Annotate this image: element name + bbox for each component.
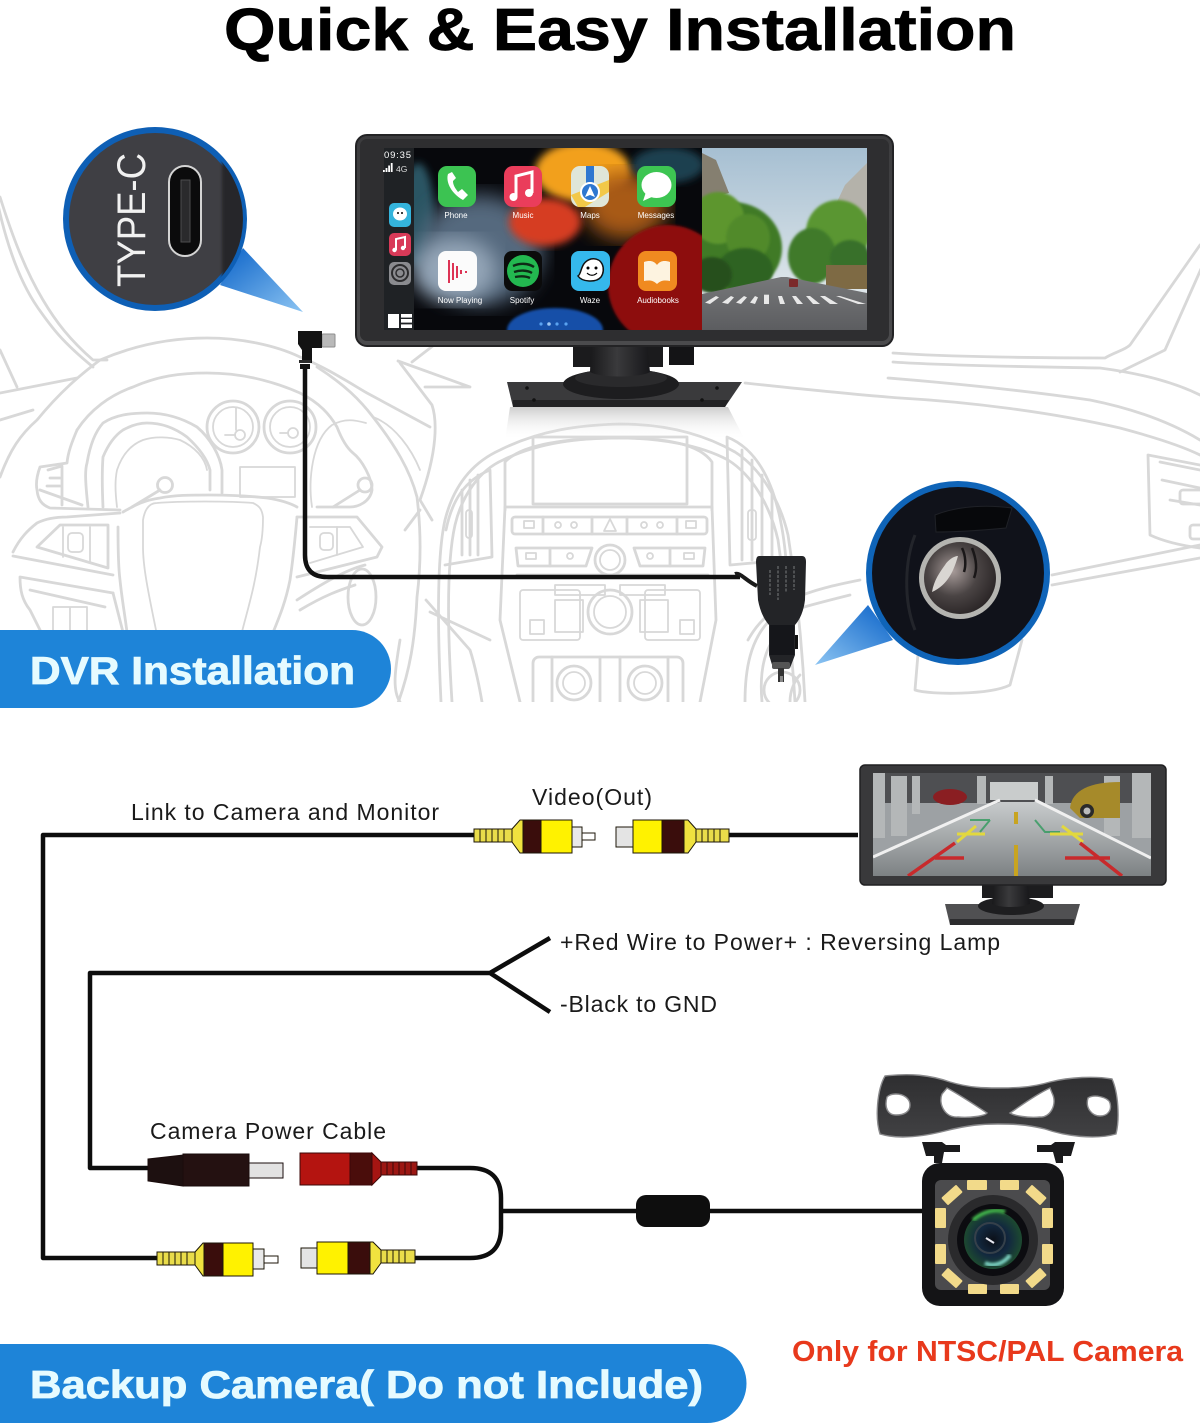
inline box <box>636 1195 710 1227</box>
app: Now Playing <box>438 251 482 305</box>
lower right trim <box>745 580 860 702</box>
USB-C plug <box>298 331 335 369</box>
wire labels: Video(Out) <box>532 784 652 810</box>
section label: DVR Installation: DVR Installation <box>30 650 355 693</box>
callout tail <box>220 248 303 312</box>
app: Messages <box>637 166 676 220</box>
LED ring <box>935 1180 1053 1294</box>
buttons row 1 <box>512 517 707 534</box>
app: Spotify <box>504 251 542 305</box>
far right vent <box>1148 455 1200 548</box>
RCA plug: camera left <box>157 1243 278 1276</box>
wire labels <box>131 784 1000 1144</box>
callout tail <box>815 605 893 665</box>
app: Messages: Messages <box>638 211 674 220</box>
note: camera compatibility: Only for NTSC/PAL Camera <box>792 1336 1184 1368</box>
CarPlay sidebar <box>383 148 414 330</box>
section label: DVR Installation <box>0 630 391 708</box>
callout circle <box>866 481 1050 665</box>
parking camera view <box>873 773 1151 876</box>
right vent <box>727 437 786 565</box>
steering wheel hub <box>123 495 297 512</box>
callout: Type-C port <box>63 127 303 312</box>
buttons row 2 <box>516 548 705 566</box>
RCA plug: video out left <box>474 820 595 853</box>
passenger door box <box>915 630 1022 693</box>
console panels <box>500 507 716 702</box>
wire labels: Camera Power Cable <box>150 1118 386 1144</box>
USB-C port <box>169 166 201 256</box>
main monitor <box>356 135 893 407</box>
section label: Backup Camera <box>0 1344 747 1423</box>
dashboard line art background <box>0 197 1200 708</box>
centre console shell <box>438 424 805 702</box>
CarPlay sidebar: 4G <box>396 164 407 174</box>
right dashboard lines <box>745 383 1200 455</box>
wire labels: +Red Wire to Power+ : Reversing Lamp <box>560 929 1000 955</box>
centre screen <box>505 438 712 510</box>
app icons <box>438 166 679 305</box>
app: Audiobooks <box>637 251 679 305</box>
small monitor stand <box>945 884 1080 925</box>
RCA plug: camera right <box>301 1242 415 1274</box>
left vent <box>445 470 492 565</box>
power plug: black <box>148 1154 283 1186</box>
app: Maps <box>571 166 609 220</box>
page dots <box>539 322 568 326</box>
instrument cluster <box>86 413 222 507</box>
app: Waze: Waze <box>580 296 601 305</box>
app: Waze <box>571 251 610 305</box>
mounting bracket <box>877 1075 1118 1163</box>
camera lens <box>948 1195 1038 1285</box>
small monitor bezel <box>860 765 1166 885</box>
camera housing <box>922 1163 1064 1306</box>
wire labels: -Black to GND <box>560 991 717 1017</box>
app: Spotify: Spotify <box>510 296 534 305</box>
app: Music <box>504 166 542 220</box>
rotated label: TYPE-C <box>110 153 154 287</box>
wheel controls <box>13 513 120 575</box>
RCA plug: video out right <box>616 820 729 853</box>
cable <box>305 368 740 577</box>
A-pillar and upper left <box>0 197 107 420</box>
CarPlay wallpaper <box>414 148 702 330</box>
app: Phone <box>438 166 476 220</box>
power plug: red <box>300 1153 417 1185</box>
callout circle <box>63 127 247 311</box>
car charger <box>735 556 806 682</box>
app: Audiobooks: Audiobooks <box>637 296 679 305</box>
callout: cigarette lighter socket <box>815 481 1050 665</box>
backup camera <box>877 1075 1118 1306</box>
wires <box>43 835 925 1258</box>
app: Maps: Maps <box>580 211 600 220</box>
plate reflection <box>505 407 745 440</box>
section label: Backup Camera: Backup Camera( Do not Include) <box>30 1364 703 1407</box>
small monitor with reversing view <box>860 765 1166 925</box>
CarPlay sidebar: 09:35 <box>384 150 411 161</box>
monitor bezel <box>356 135 893 346</box>
app: Phone: Phone <box>444 211 468 220</box>
steering wheel second rim and spoke <box>77 373 372 507</box>
USB-C cable and car charger <box>298 331 806 682</box>
steering wheel outer rim <box>0 338 430 477</box>
wire labels: Link to Camera and Monitor <box>131 799 439 825</box>
wiring diagram <box>43 784 1000 1276</box>
socket ring <box>919 537 1001 619</box>
middle switchgear <box>516 574 710 575</box>
socket flap <box>935 506 1012 532</box>
left steering column <box>400 363 435 530</box>
dash camera road view <box>702 148 867 330</box>
app: Music: Music <box>513 211 533 220</box>
app: Now Playing: Now Playing <box>438 296 482 305</box>
monitor stand <box>507 345 742 407</box>
